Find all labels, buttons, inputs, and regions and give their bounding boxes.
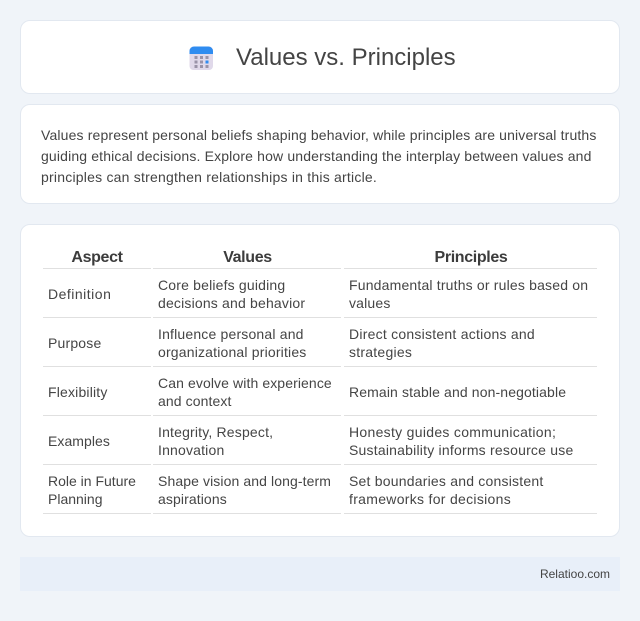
row: Examples: Sustainability informs resource use: [349, 442, 573, 458]
row: Role in Future Planning: Set boundaries and consistent: [349, 473, 543, 489]
table header: Values: [223, 249, 272, 266]
row: Purpose: strategies: [349, 344, 412, 360]
panel: comparison table: [20, 224, 620, 537]
row: Definition: values: [349, 295, 391, 311]
row: Flexibility: Remain stable and non-negotiable: [349, 384, 566, 400]
row: Purpose: Direct consistent actions and: [349, 326, 535, 342]
row: Definition: [48, 277, 588, 311]
row: Flexibility: Can evolve with experience: [158, 375, 332, 391]
row: Examples: Integrity, Respect,: [158, 424, 273, 440]
panel: title card: [20, 20, 620, 94]
intro text: [41, 127, 597, 185]
row: Role in Future Planning: frameworks for decisions: [349, 491, 511, 507]
table header: Principles: [434, 249, 507, 266]
table header: [71, 249, 508, 266]
row: Definition: Definition: [48, 286, 111, 302]
row: Examples: [48, 424, 573, 458]
row: Purpose: Influence personal and: [158, 326, 304, 342]
row: Definition: Core beliefs guiding: [158, 277, 285, 293]
row: Flexibility: [48, 375, 566, 409]
title: Values vs. Principles: [236, 44, 456, 71]
row: Role in Future Planning: aspirations: [158, 491, 227, 507]
row: Flexibility: and context: [158, 393, 232, 409]
intro text: Values represent personal beliefs shaping behavior, while principles are universal truths: [41, 127, 597, 143]
row: Flexibility: Flexibility: [48, 384, 108, 400]
row: Purpose: [48, 326, 535, 360]
row: Examples: Honesty guides communication;: [349, 424, 556, 440]
footer bar: [20, 557, 620, 591]
row: Examples: Examples: [48, 433, 110, 449]
footer credit: Relatioo.com: [540, 567, 610, 581]
row: Definition: Fundamental truths or rules based on: [349, 277, 588, 293]
row: Role in Future Planning: Role in Future: [48, 473, 136, 489]
intro text: guiding ethical decisions. Explore how understanding the interplay between values and: [41, 148, 592, 164]
row: Role in Future Planning: Planning: [48, 491, 102, 507]
row: Role in Future Planning: [48, 473, 544, 507]
row: Purpose: organizational priorities: [158, 344, 306, 360]
table header: Aspect: [71, 249, 123, 266]
icon: calendar: [190, 46, 213, 70]
row: Examples: Innovation: [158, 442, 224, 458]
intro text: principles can strengthen relationships in this article.: [41, 169, 377, 185]
panel: introduction: [20, 104, 620, 204]
row: Definition: decisions and behavior: [158, 295, 305, 311]
row: Role in Future Planning: Shape vision and long-term: [158, 473, 331, 489]
row: Purpose: Purpose: [48, 335, 101, 351]
